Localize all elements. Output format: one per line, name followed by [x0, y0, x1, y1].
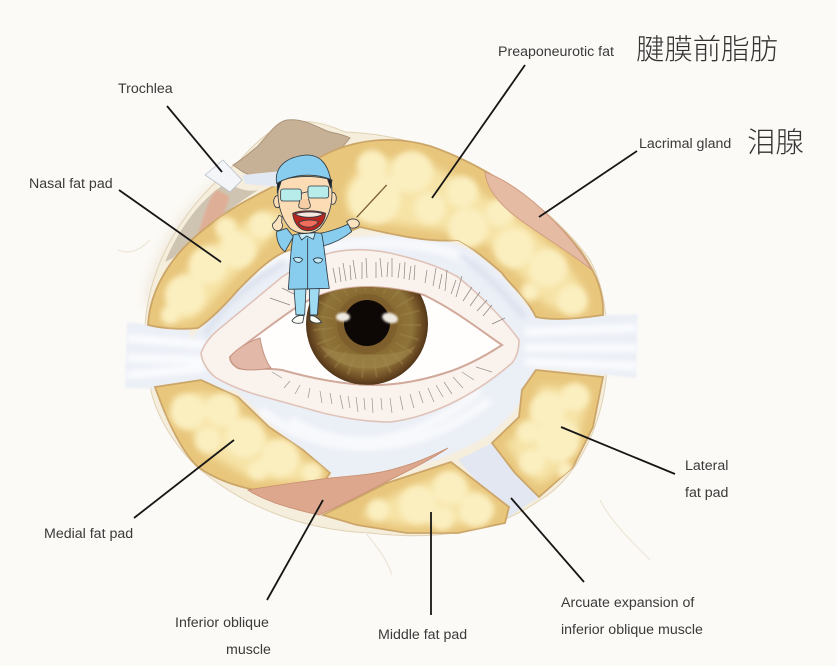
- medial fat pad: [155, 380, 330, 490]
- upper lashes: [270, 258, 505, 324]
- face: [278, 176, 332, 233]
- panel: blue-white septum behind the eye: [125, 236, 638, 478]
- ears: [274, 196, 281, 208]
- label: Inferior oblique muscle: [175, 615, 271, 658]
- legs: [294, 288, 319, 315]
- coat: [288, 232, 329, 289]
- panel: lower fat pads: [155, 370, 603, 533]
- label: Trochlea: Trochlea: [118, 81, 173, 97]
- label: Lateral fat pad: fat pad: [685, 485, 728, 501]
- mouth: [293, 211, 326, 231]
- iris: [306, 287, 428, 385]
- eye opening: [230, 287, 502, 385]
- shoes: [292, 315, 322, 323]
- icon: tan tissue above trochlea: [233, 120, 350, 177]
- label: Medial fat pad: Medial fat pad: [44, 526, 133, 542]
- hands: [273, 215, 283, 231]
- pointer stick: [357, 185, 387, 217]
- pointing arm: [320, 224, 352, 246]
- glasses: [281, 186, 329, 201]
- lacrimal gland: [485, 172, 592, 270]
- label: Arcuate expansion of inferior oblique muscle: Arcuate expansion of: [561, 595, 694, 611]
- label: Arcuate expansion of inferior oblique muscle: [561, 595, 703, 638]
- collar: [298, 233, 315, 240]
- nose: [299, 198, 310, 209]
- cap: [276, 155, 331, 183]
- label: Nasal fat pad: Nasal fat pad: [29, 176, 113, 192]
- label: Lacrimal gland: Lacrimal gland: [639, 136, 731, 152]
- hair: [277, 178, 332, 193]
- inferior oblique muscle: [248, 448, 448, 515]
- label: Chinese lacrimal gland: 泪腺: [747, 120, 804, 161]
- label: Lateral fat pad: [685, 458, 728, 501]
- eyelid rim: [201, 250, 519, 422]
- icon: cartoon doctor with pointer: [273, 155, 387, 323]
- highlights: [336, 311, 399, 325]
- grey-tan band beside nasal fat pad: [165, 183, 258, 262]
- pupil: [344, 300, 390, 346]
- leader lines: [119, 65, 675, 615]
- iris rays: [323, 280, 411, 368]
- panel: upper fat pads (nasal and preaponeurotic): [148, 140, 603, 329]
- label: Chinese preaponeurotic fat: 腱膜前脂肪: [636, 27, 778, 68]
- orbit: soft skin shading around the eye socket: [118, 121, 650, 575]
- label: Inferior oblique muscle: muscle: [226, 642, 271, 658]
- lower lashes: [272, 367, 492, 413]
- label: Lateral fat pad: Lateral: [685, 458, 728, 474]
- label: Inferior oblique muscle: Inferior oblique: [175, 615, 269, 631]
- trochlea: [205, 160, 282, 192]
- panel: eye: [201, 250, 519, 422]
- label: Arcuate expansion of inferior oblique muscle: inferior oblique muscle: [561, 622, 703, 638]
- middle fat pad: [323, 462, 509, 533]
- label: Preaponeurotic fat: Preaponeurotic fat: [498, 44, 614, 60]
- lateral fat pad: [492, 370, 603, 497]
- caruncle: [230, 338, 271, 370]
- arcuate expansion band: [458, 443, 539, 517]
- label: Middle fat pad: Middle fat pad: [378, 627, 467, 643]
- raised arm: [277, 228, 293, 252]
- pink muscle beside nasal fat: [197, 190, 229, 240]
